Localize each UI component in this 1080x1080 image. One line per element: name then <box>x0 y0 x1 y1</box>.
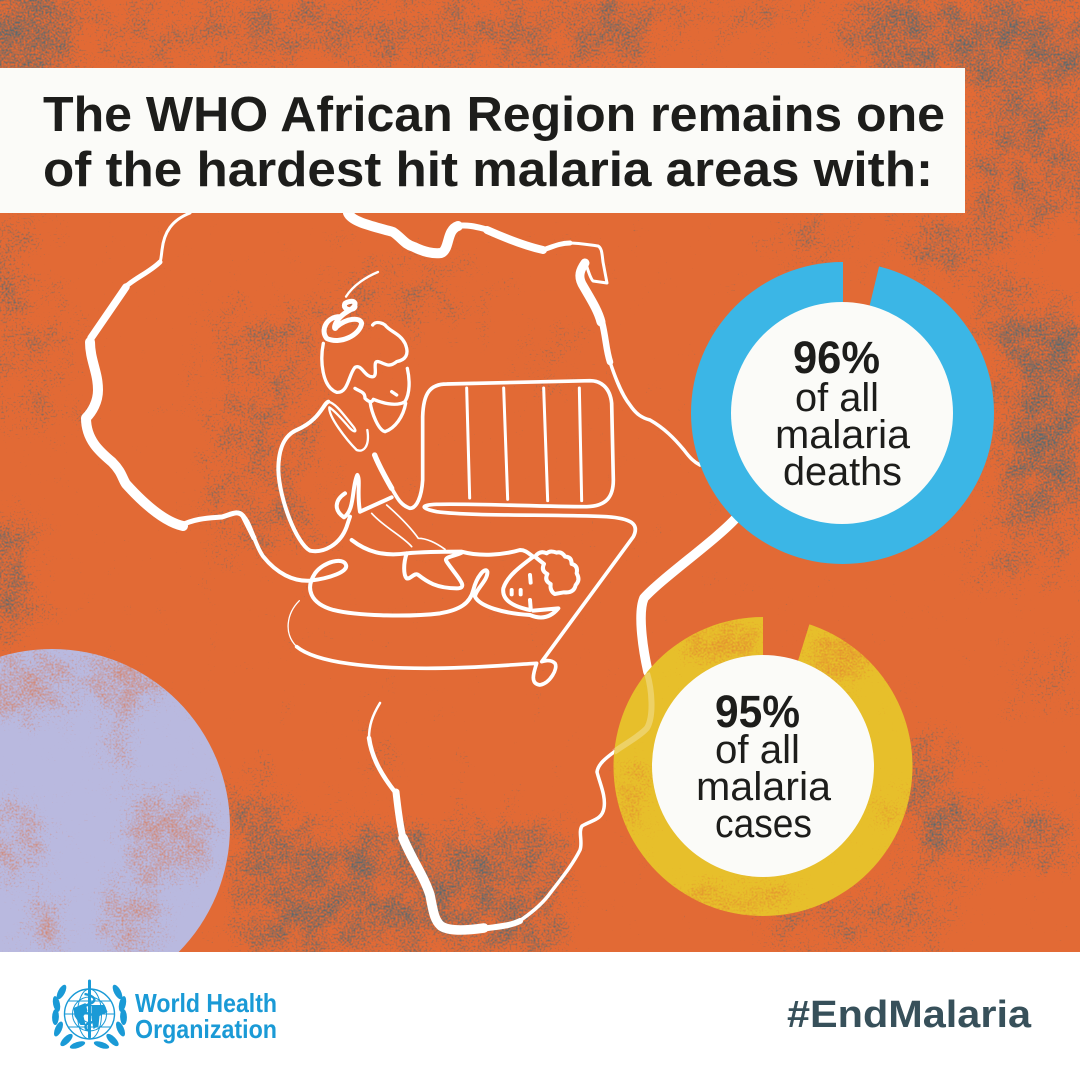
WHO emblem <box>52 981 127 1050</box>
title banner <box>0 68 965 213</box>
stat text <box>775 332 911 494</box>
stat text: of all <box>715 728 800 772</box>
stat text: 95% <box>715 686 800 737</box>
WHO wordmark <box>135 988 277 1044</box>
child curly hair <box>535 551 578 594</box>
map: east coast below blue ring <box>641 518 736 672</box>
stat text: deaths <box>783 450 902 494</box>
nurse neckline and collar <box>328 402 368 451</box>
yellow donut: 95% of all malaria cases <box>614 617 912 916</box>
child head and face <box>503 557 533 610</box>
bed rail bars <box>467 388 582 501</box>
translucent map line over ring <box>614 673 652 752</box>
blanket and child body line <box>240 514 558 617</box>
blue donut: 96% of all malaria deaths <box>691 262 994 564</box>
yellow ring <box>614 617 912 916</box>
stat text: 96% <box>793 332 880 383</box>
nurse cap bun <box>324 301 362 340</box>
stat text: malaria <box>775 413 911 457</box>
bed tail thin start <box>288 601 299 647</box>
nurse head and hair <box>322 322 407 392</box>
nurse face mask <box>355 368 409 432</box>
map: north and east coast <box>348 213 700 465</box>
bed line and headboard <box>297 381 635 685</box>
WHO wordmark: Organization <box>135 1014 277 1044</box>
nurse arm to child <box>372 505 445 549</box>
map: southern cone <box>369 703 614 930</box>
nurse sleeve stroke <box>375 455 392 488</box>
hashtag: #EndMalaria <box>787 994 1032 1036</box>
nurse body <box>278 402 392 551</box>
blue ring <box>691 262 994 564</box>
stat text: cases <box>715 802 812 846</box>
stat text <box>696 686 832 846</box>
stat text: of all <box>795 376 879 420</box>
title text line 1: The WHO African Region remains one <box>43 88 945 142</box>
title text line 2: of the hardest hit malaria areas with: <box>43 143 933 197</box>
white footer <box>0 952 1080 1080</box>
stat text: malaria <box>696 765 832 809</box>
lavender circle <box>0 649 230 952</box>
Africa map outline <box>86 213 736 930</box>
cap tail <box>346 272 378 297</box>
nurse hand on child <box>352 540 533 588</box>
line drawing: nurse tending child in hospital bed <box>240 272 635 685</box>
map: north-west coast <box>86 213 254 538</box>
WHO wordmark: World Health <box>135 988 277 1018</box>
